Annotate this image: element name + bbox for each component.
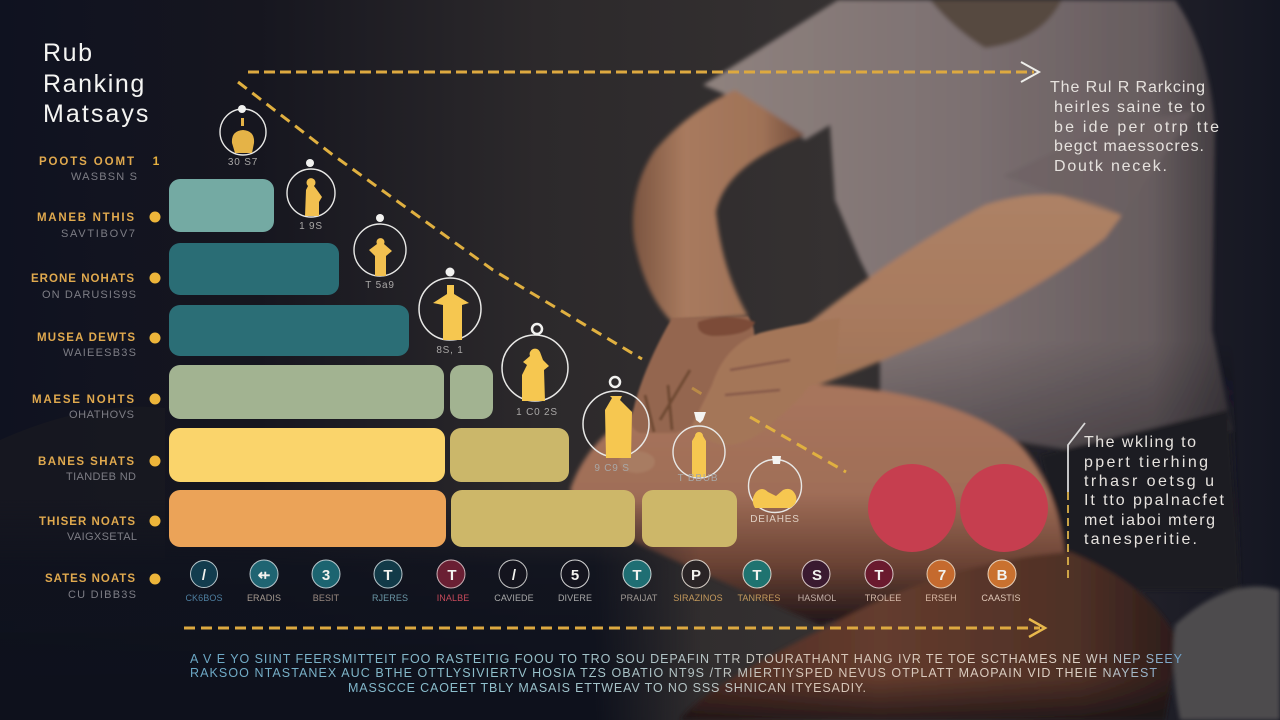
row label 5 (32, 394, 160, 421)
step icon 8: T (632, 567, 642, 584)
row label 1 (39, 154, 160, 183)
callout: top right text: Doutk necek. (1054, 158, 1167, 175)
callout: lower right text: met iaboi mterg (1084, 512, 1215, 529)
row labels column (31, 154, 160, 601)
step icon 12 (865, 560, 901, 603)
step icon 8: PRAIJAT (620, 593, 658, 603)
callout: lower right text (1084, 434, 1225, 548)
bottom icon row (185, 560, 1021, 603)
icon: oil bottle 8 (748, 456, 802, 525)
icon: oil bottle 8: DEIAHES (750, 514, 800, 525)
step icon 7 (558, 560, 592, 603)
step icon 5: T (447, 567, 457, 584)
stacked ranking bars (169, 179, 737, 547)
row label 2: MANEB NTHIS (37, 212, 134, 224)
callout: lower right text: The wkling to (1084, 434, 1196, 451)
step icon 3: 3 (322, 567, 330, 584)
step icon 5 (437, 560, 469, 603)
step icon 7: 5 (571, 567, 579, 584)
dashed arrow: bottom horizontal (184, 619, 1045, 637)
step icon 2 (247, 560, 281, 603)
icon: oil bottle 4: 8S, 1 (436, 345, 464, 356)
callout: lower right text: It tto ppalnacfet (1084, 492, 1225, 509)
step icon 4 (372, 560, 408, 603)
bar row 6 segment 3 (642, 490, 737, 547)
row label 3: ON DARUSIS9S (42, 289, 136, 301)
bottom caption: MASSCCE CAOEET TBLY MASAIS ETTWEAV TO NO SSS SHNICAN ITYESADIY. (348, 681, 866, 695)
red circle 1 (868, 464, 956, 552)
bar row 5 segment (450, 428, 569, 482)
step icon 14 (981, 560, 1021, 603)
step icon 12: TROLEE (865, 593, 901, 603)
row label 6: BANES SHATS (38, 456, 134, 468)
row label 7: VAIGXSETAL (67, 531, 137, 543)
callout: top right text: be ide per otrp tte (1054, 119, 1219, 136)
red circle 2 (960, 464, 1048, 552)
callout: top right text: begct maessocres. (1054, 138, 1204, 155)
row label 1: WASBSN S (71, 171, 137, 183)
step icon 14: B (997, 567, 1008, 584)
step icon 9: SIRAZINOS (673, 593, 723, 603)
step icon 10 (737, 560, 781, 603)
icon: oil bottle 2: 1 9S (299, 221, 323, 232)
step icon 8 (620, 560, 658, 603)
icon: oil bottle 5 (502, 324, 568, 418)
callout: top right text: The Rul R Rarkcing (1050, 79, 1205, 96)
icon: oil bottle 3: T 5a9 (365, 280, 395, 291)
row label 8 (45, 573, 160, 601)
step icon 11 (798, 560, 836, 603)
icon: oil bottle 4 (419, 268, 481, 356)
bar row 6 segment 2 (451, 490, 635, 547)
row label 8: SATES NOATS (45, 573, 135, 585)
bottom caption: RAKSOO NTASTANEX AUC BTHE OTTLYSIVIERTV HOSIA TZS OBATIO NT9S /TR MIERTIYSPED NEVUS OTPLATT MAOPAIN VID THEIE NAYEST (190, 666, 1157, 680)
row label 7 (39, 516, 160, 543)
row label 1: 1 (153, 154, 160, 168)
row label 6 (38, 456, 160, 483)
step icon 13: 7 (938, 567, 946, 584)
row label 1: POOTS OOMT (39, 156, 134, 168)
title: Ranking (43, 70, 146, 98)
step icon 2: ⇷ (258, 567, 271, 584)
bar row 6 main (169, 490, 446, 547)
step icon 13 (925, 560, 957, 603)
icon: oil bottle 6 (583, 377, 649, 474)
row label 8: CU DIBB3S (68, 589, 136, 601)
title (43, 39, 150, 128)
step icon 11: S (812, 567, 822, 584)
step icon 3: BESIT (313, 593, 340, 603)
step icon 4: RJERES (372, 593, 408, 603)
bar row 3 (169, 305, 409, 356)
row label 3: ERONE NOHATS (31, 273, 134, 285)
callout: lower right text: ppert tierhing (1084, 454, 1208, 471)
row label 2: SAVTIBOV7 (61, 228, 135, 240)
step icon 6: CAVIEDE (494, 593, 534, 603)
row label 5: OHATHOVS (69, 409, 134, 421)
step icon 10: TANRRES (737, 593, 781, 603)
step icon 9: P (691, 567, 701, 584)
icon: oil bottle 6: 9 C9 S (594, 463, 630, 474)
row label 4: WAIEESB3S (63, 347, 136, 359)
icon: oil bottle 2 (287, 159, 335, 232)
callout: top right text: heirles saine te to (1054, 99, 1205, 116)
row label 3 (31, 272, 160, 301)
icon: oil bottle 3 (354, 214, 406, 291)
step icon 7: DIVERE (558, 593, 592, 603)
dashed diagonal trend line (238, 82, 846, 472)
step icon 1: CK6BOS (185, 593, 223, 603)
step icon 6 (494, 560, 534, 603)
callout: lower right text: trhasr oetsg u (1084, 473, 1214, 490)
step icon 10: T (752, 567, 762, 584)
icon: oil bottle 1: 30 S7 (228, 157, 258, 168)
step icon 6: / (512, 567, 517, 584)
bar row 4 main (169, 365, 444, 419)
icon: oil bottle 1 (220, 105, 266, 168)
callout: top right text (1050, 79, 1219, 175)
step icon 4: T (383, 567, 393, 584)
bar row 2 (169, 243, 339, 295)
icon: oil bottle 7 (673, 412, 725, 484)
row label 4: MUSEA DEWTS (37, 332, 135, 344)
bottom caption (190, 652, 1183, 695)
step icon 9 (673, 560, 723, 603)
dashed arrow: top horizontal (248, 62, 1039, 82)
icon: oil bottle 7: T BBUB (678, 473, 718, 484)
background photo: massage scene (296, 0, 1280, 720)
icon: oil bottle 5: 1 C0 2S (516, 407, 558, 418)
callout: lower right text: tanesperitie. (1084, 531, 1197, 548)
row label 2 (37, 212, 160, 240)
step icon 1: / (202, 567, 207, 584)
row label 6: TIANDEB ND (66, 471, 136, 483)
step icon 13: ERSEH (925, 593, 957, 603)
title: Matsays (43, 100, 150, 128)
bar row 5 main (169, 428, 445, 482)
row label 7: THISER NOATS (39, 516, 135, 528)
bar row 4 segment (450, 365, 493, 419)
bar row 1 (169, 179, 274, 232)
step icon 11: HASMOL (798, 593, 836, 603)
step icon 3 (312, 560, 340, 603)
bottom caption: A V E YO SIINT FEERSMITTEIT FOO RASTEITIG FOOU TO TRO SOU DEPAFIN TTR DTOURATHANT HANG IVR TE TOE SCTHAMES NE WH NEP SEEY (190, 652, 1183, 666)
step icon 1 (185, 560, 223, 603)
row label 5: MAESE NOHTS (32, 394, 134, 406)
step icon 12: T (874, 567, 884, 584)
title: Rub (43, 39, 94, 67)
callout bracket line (1068, 423, 1085, 582)
step icon 14: CAASTIS (981, 593, 1021, 603)
step icon 5: INALBE (437, 593, 469, 603)
step icon 2: ERADIS (247, 593, 281, 603)
row label 4 (37, 332, 160, 359)
